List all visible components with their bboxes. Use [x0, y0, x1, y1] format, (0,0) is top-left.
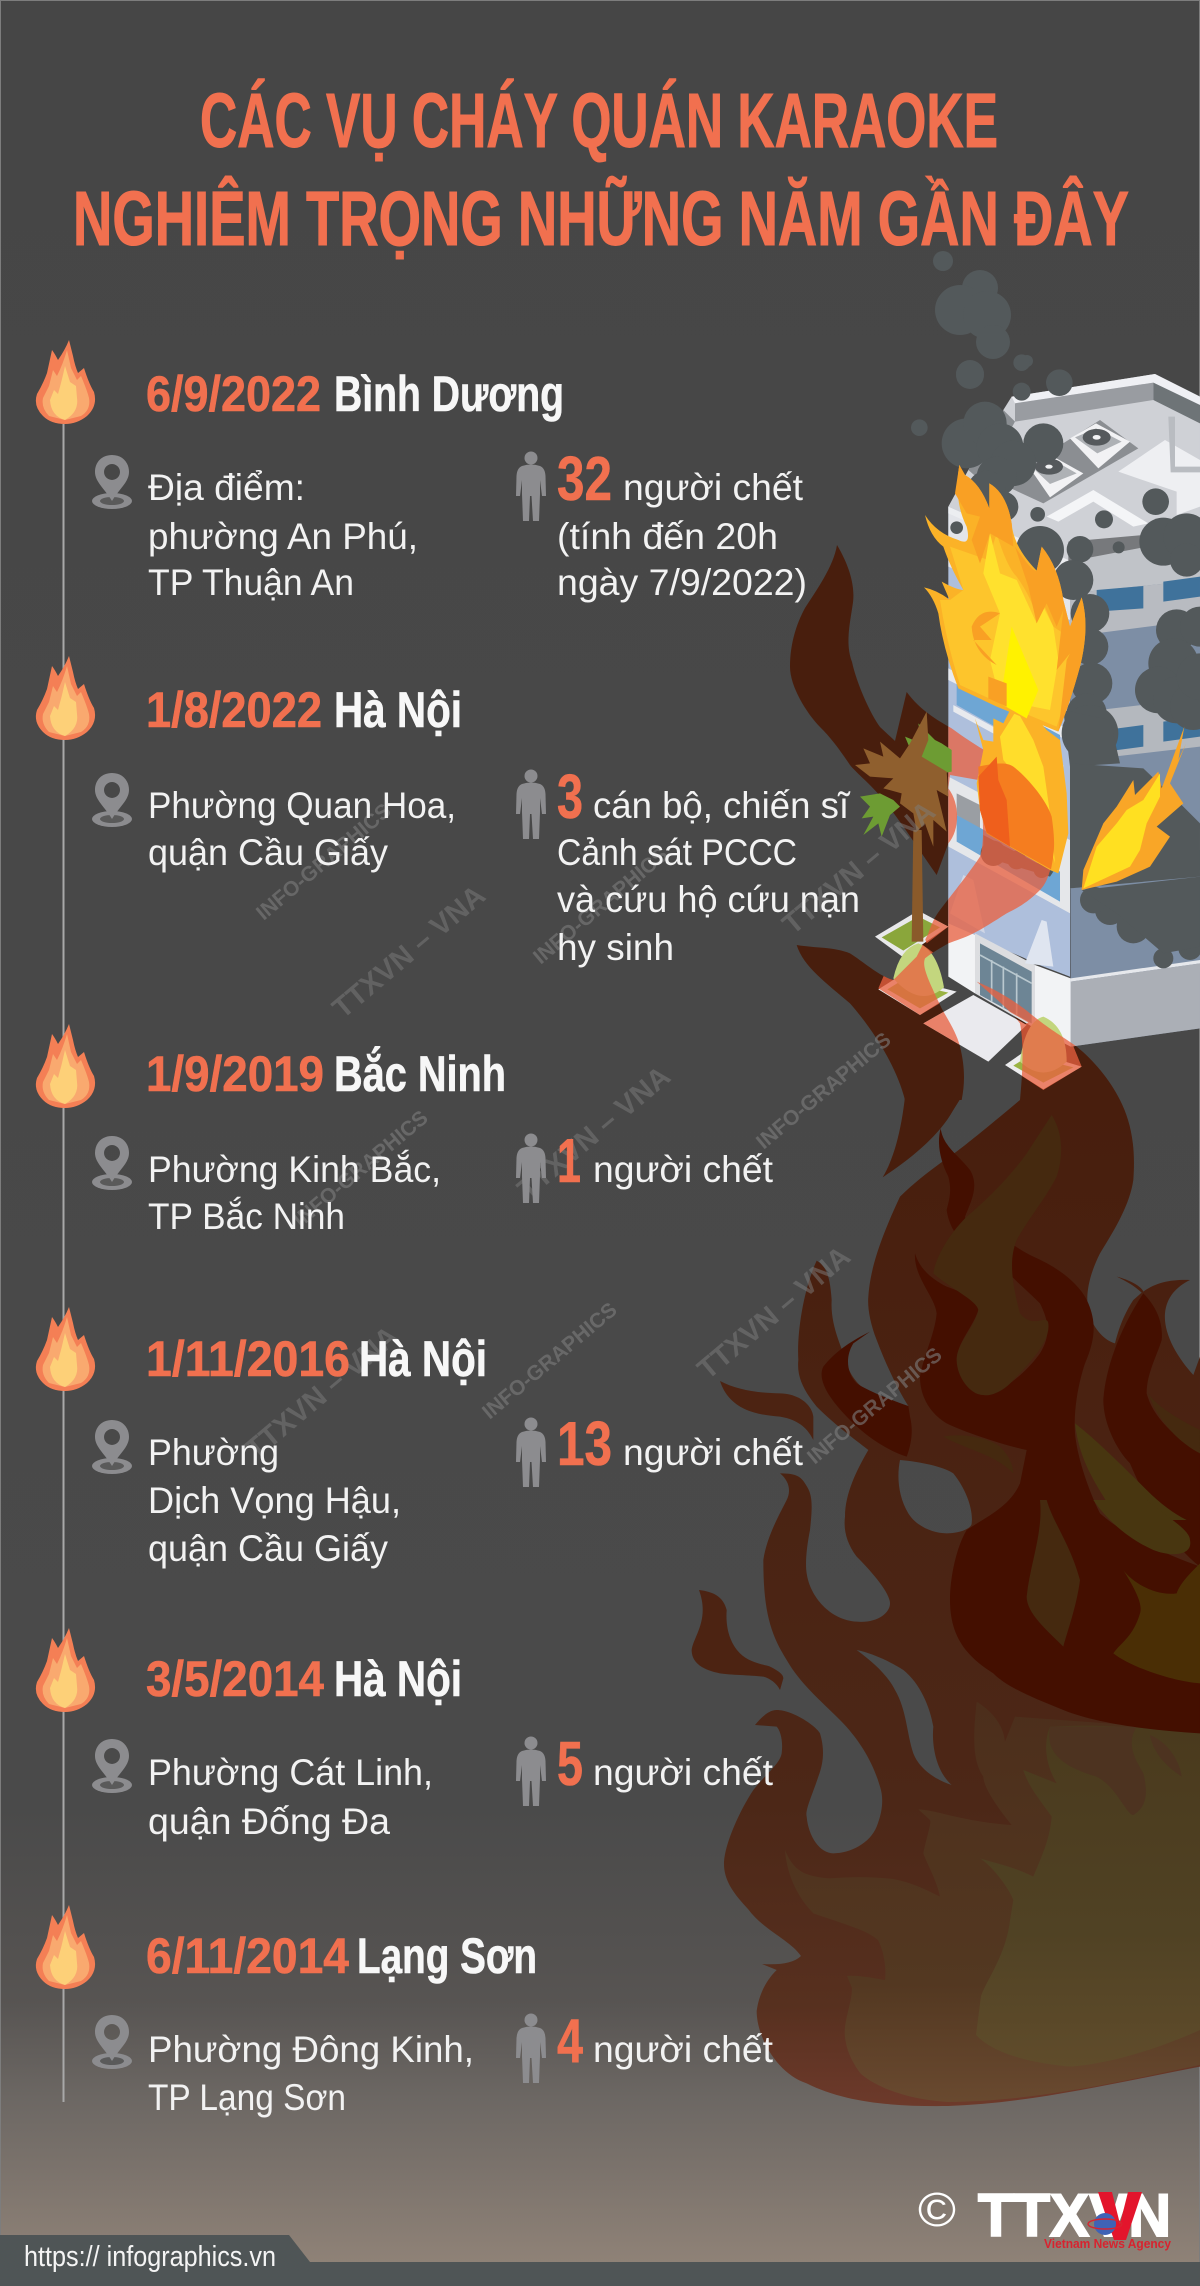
watermarks [240, 795, 947, 1469]
watermarks: INFO-GRAPHICS [529, 843, 673, 969]
date and place [146, 1651, 462, 1707]
casualties: 13 [557, 1410, 612, 1479]
casualties: 4 [557, 2007, 583, 2076]
illustration: burning building [790, 251, 1200, 1100]
location text: quận Đống Đa [148, 1801, 390, 1842]
pin icon [92, 1420, 132, 1474]
person icon [516, 1736, 546, 1806]
casualties [557, 445, 807, 603]
person icon [516, 452, 546, 521]
planters and bushes [875, 911, 1082, 1089]
flame icon [36, 340, 95, 424]
flame side tongues [692, 1381, 813, 1690]
timeline line [62, 424, 64, 2102]
casualties: cán bộ, chiến sĩ [593, 785, 851, 826]
date and place: Bắc Ninh [334, 1046, 506, 1102]
fire: middle flame [975, 703, 1068, 873]
location text: TP Bắc Ninh [148, 1196, 345, 1237]
watermarks: TTXVN – VNA [240, 1320, 405, 1466]
casualties [557, 2007, 774, 2076]
person icon [516, 770, 546, 839]
watermarks: INFO-GRAPHICS [803, 1343, 947, 1469]
location text [148, 467, 418, 603]
website url: https:// infographics.vn [24, 2241, 276, 2273]
location text [148, 785, 456, 873]
flame left tail [883, 1097, 962, 1177]
casualties: hy sinh [557, 927, 674, 968]
date and place [146, 682, 462, 738]
entry 4 [36, 1307, 804, 1569]
location text [148, 1752, 433, 1842]
ribbon flame behind building [790, 545, 1120, 1100]
flame icon [36, 1024, 95, 1108]
entry 3 [36, 1024, 774, 1237]
flame icon [36, 1628, 95, 1712]
date and place: Lạng Sơn [357, 1928, 537, 1984]
casualties: người chết [593, 1752, 774, 1793]
pin icon [92, 1136, 132, 1190]
building walls and windows [948, 507, 1200, 1047]
entry 2 [36, 656, 860, 968]
date and place: Hà Nội [334, 1651, 462, 1707]
logo: TTXVN: TTXVN [978, 2182, 1171, 2249]
location text: TP Thuận An [148, 562, 354, 603]
watermarks: INFO-GRAPHICS [478, 1298, 622, 1424]
illustration: large flame silhouette [692, 1097, 1200, 2106]
fire: right flame [1082, 727, 1186, 890]
date and place: 6/11/2014 [146, 1928, 349, 1984]
flame brown patches over the core [1049, 1727, 1182, 1815]
flame icon [36, 1307, 95, 1391]
flame dark overlap layers [822, 1128, 1200, 1733]
pin icon [92, 455, 132, 509]
fire: upper big flame [924, 465, 1085, 732]
person icon [516, 2014, 546, 2083]
pin icon [92, 1739, 132, 1793]
location text: Phường Kinh Bắc, [148, 1149, 441, 1190]
logo: copyright mark: © [918, 2184, 956, 2237]
casualties [557, 1730, 774, 1799]
casualties: ngày 7/9/2022) [557, 562, 807, 603]
date and place: Hà Nội [334, 682, 462, 738]
casualties: người chết [623, 1432, 804, 1473]
pin icon [92, 2015, 132, 2069]
location text [148, 1432, 401, 1569]
date and place: 1/8/2022 [146, 682, 322, 738]
date and place: Hà Nội [359, 1331, 487, 1387]
flame outer silhouette [724, 1100, 1200, 2106]
casualties: 5 [557, 1730, 583, 1799]
person icon [516, 1134, 546, 1203]
location text: phường An Phú, [148, 516, 418, 557]
flame icon [36, 656, 95, 740]
casualties: 3 [557, 763, 583, 832]
casualties: người chết [593, 2029, 774, 2070]
casualties [557, 1410, 804, 1479]
date and place: Bình Dương [334, 366, 564, 422]
watermarks: INFO-GRAPHICS [252, 799, 396, 925]
location text: quận Cầu Giấy [148, 1528, 388, 1569]
location text: quận Cầu Giấy [148, 832, 388, 873]
watermarks: TTXVN – VNA [512, 1060, 677, 1206]
casualties: (tính đến 20h [557, 516, 778, 557]
entry 5 [36, 1628, 774, 1842]
location text: Phường [148, 1432, 279, 1473]
date and place: 1/9/2019 [146, 1046, 324, 1102]
flame olive core [976, 1726, 1200, 2067]
watermarks: TTXVN – VNA [777, 795, 942, 941]
date and place [146, 1046, 506, 1102]
casualties: và cứu hộ cứu nạn [557, 879, 860, 920]
person icon [516, 1418, 546, 1487]
pin icon [92, 773, 132, 827]
location text: Phường Cát Linh, [148, 1752, 433, 1793]
casualties [557, 1127, 774, 1196]
casualties: Cảnh sát PCCC [557, 832, 797, 873]
entry 1 [36, 340, 807, 603]
date and place: 6/9/2022 [146, 366, 321, 422]
watermarks: TTXVN – VNA [327, 879, 492, 1025]
location text: Phường Quan Hoa, [148, 785, 456, 826]
building roof [948, 374, 1200, 567]
entry 6 [36, 1905, 774, 2118]
casualties: 32 [557, 445, 612, 514]
location text: Dịch Vọng Hậu, [148, 1480, 401, 1521]
location text: Phường Đông Kinh, [148, 2029, 474, 2070]
flame icon [36, 1905, 95, 1989]
date and place [146, 1331, 487, 1387]
date and place [146, 1928, 537, 1984]
location text [148, 2029, 474, 2118]
casualties: người chết [593, 1149, 774, 1190]
watermarks: INFO-GRAPHICS [289, 1106, 433, 1232]
smoke [911, 251, 1200, 968]
ground tile [923, 995, 1027, 1062]
location text [148, 1149, 441, 1237]
footer band [0, 2235, 1200, 2286]
date and place: 1/11/2016 [146, 1331, 350, 1387]
building door [980, 943, 1032, 1023]
flame lower brown body [785, 1702, 1200, 2102]
location text: TP Lạng Sơn [148, 2077, 346, 2118]
palm tree [855, 712, 952, 942]
casualties: 1 [557, 1127, 581, 1196]
ribbon tint over building [878, 726, 1082, 1090]
location text: Địa điểm: [148, 467, 305, 508]
flame olive highlights [933, 1115, 1200, 1683]
watermarks: INFO-GRAPHICS [752, 1028, 896, 1154]
casualties [557, 763, 860, 968]
title [73, 77, 1129, 262]
date and place: 3/5/2014 [146, 1651, 324, 1707]
logo: TTXVN: Vietnam News Agency [1044, 2237, 1171, 2251]
watermarks: TTXVN – VNA [692, 1240, 857, 1386]
date and place [146, 366, 564, 422]
casualties: người chết [623, 467, 804, 508]
